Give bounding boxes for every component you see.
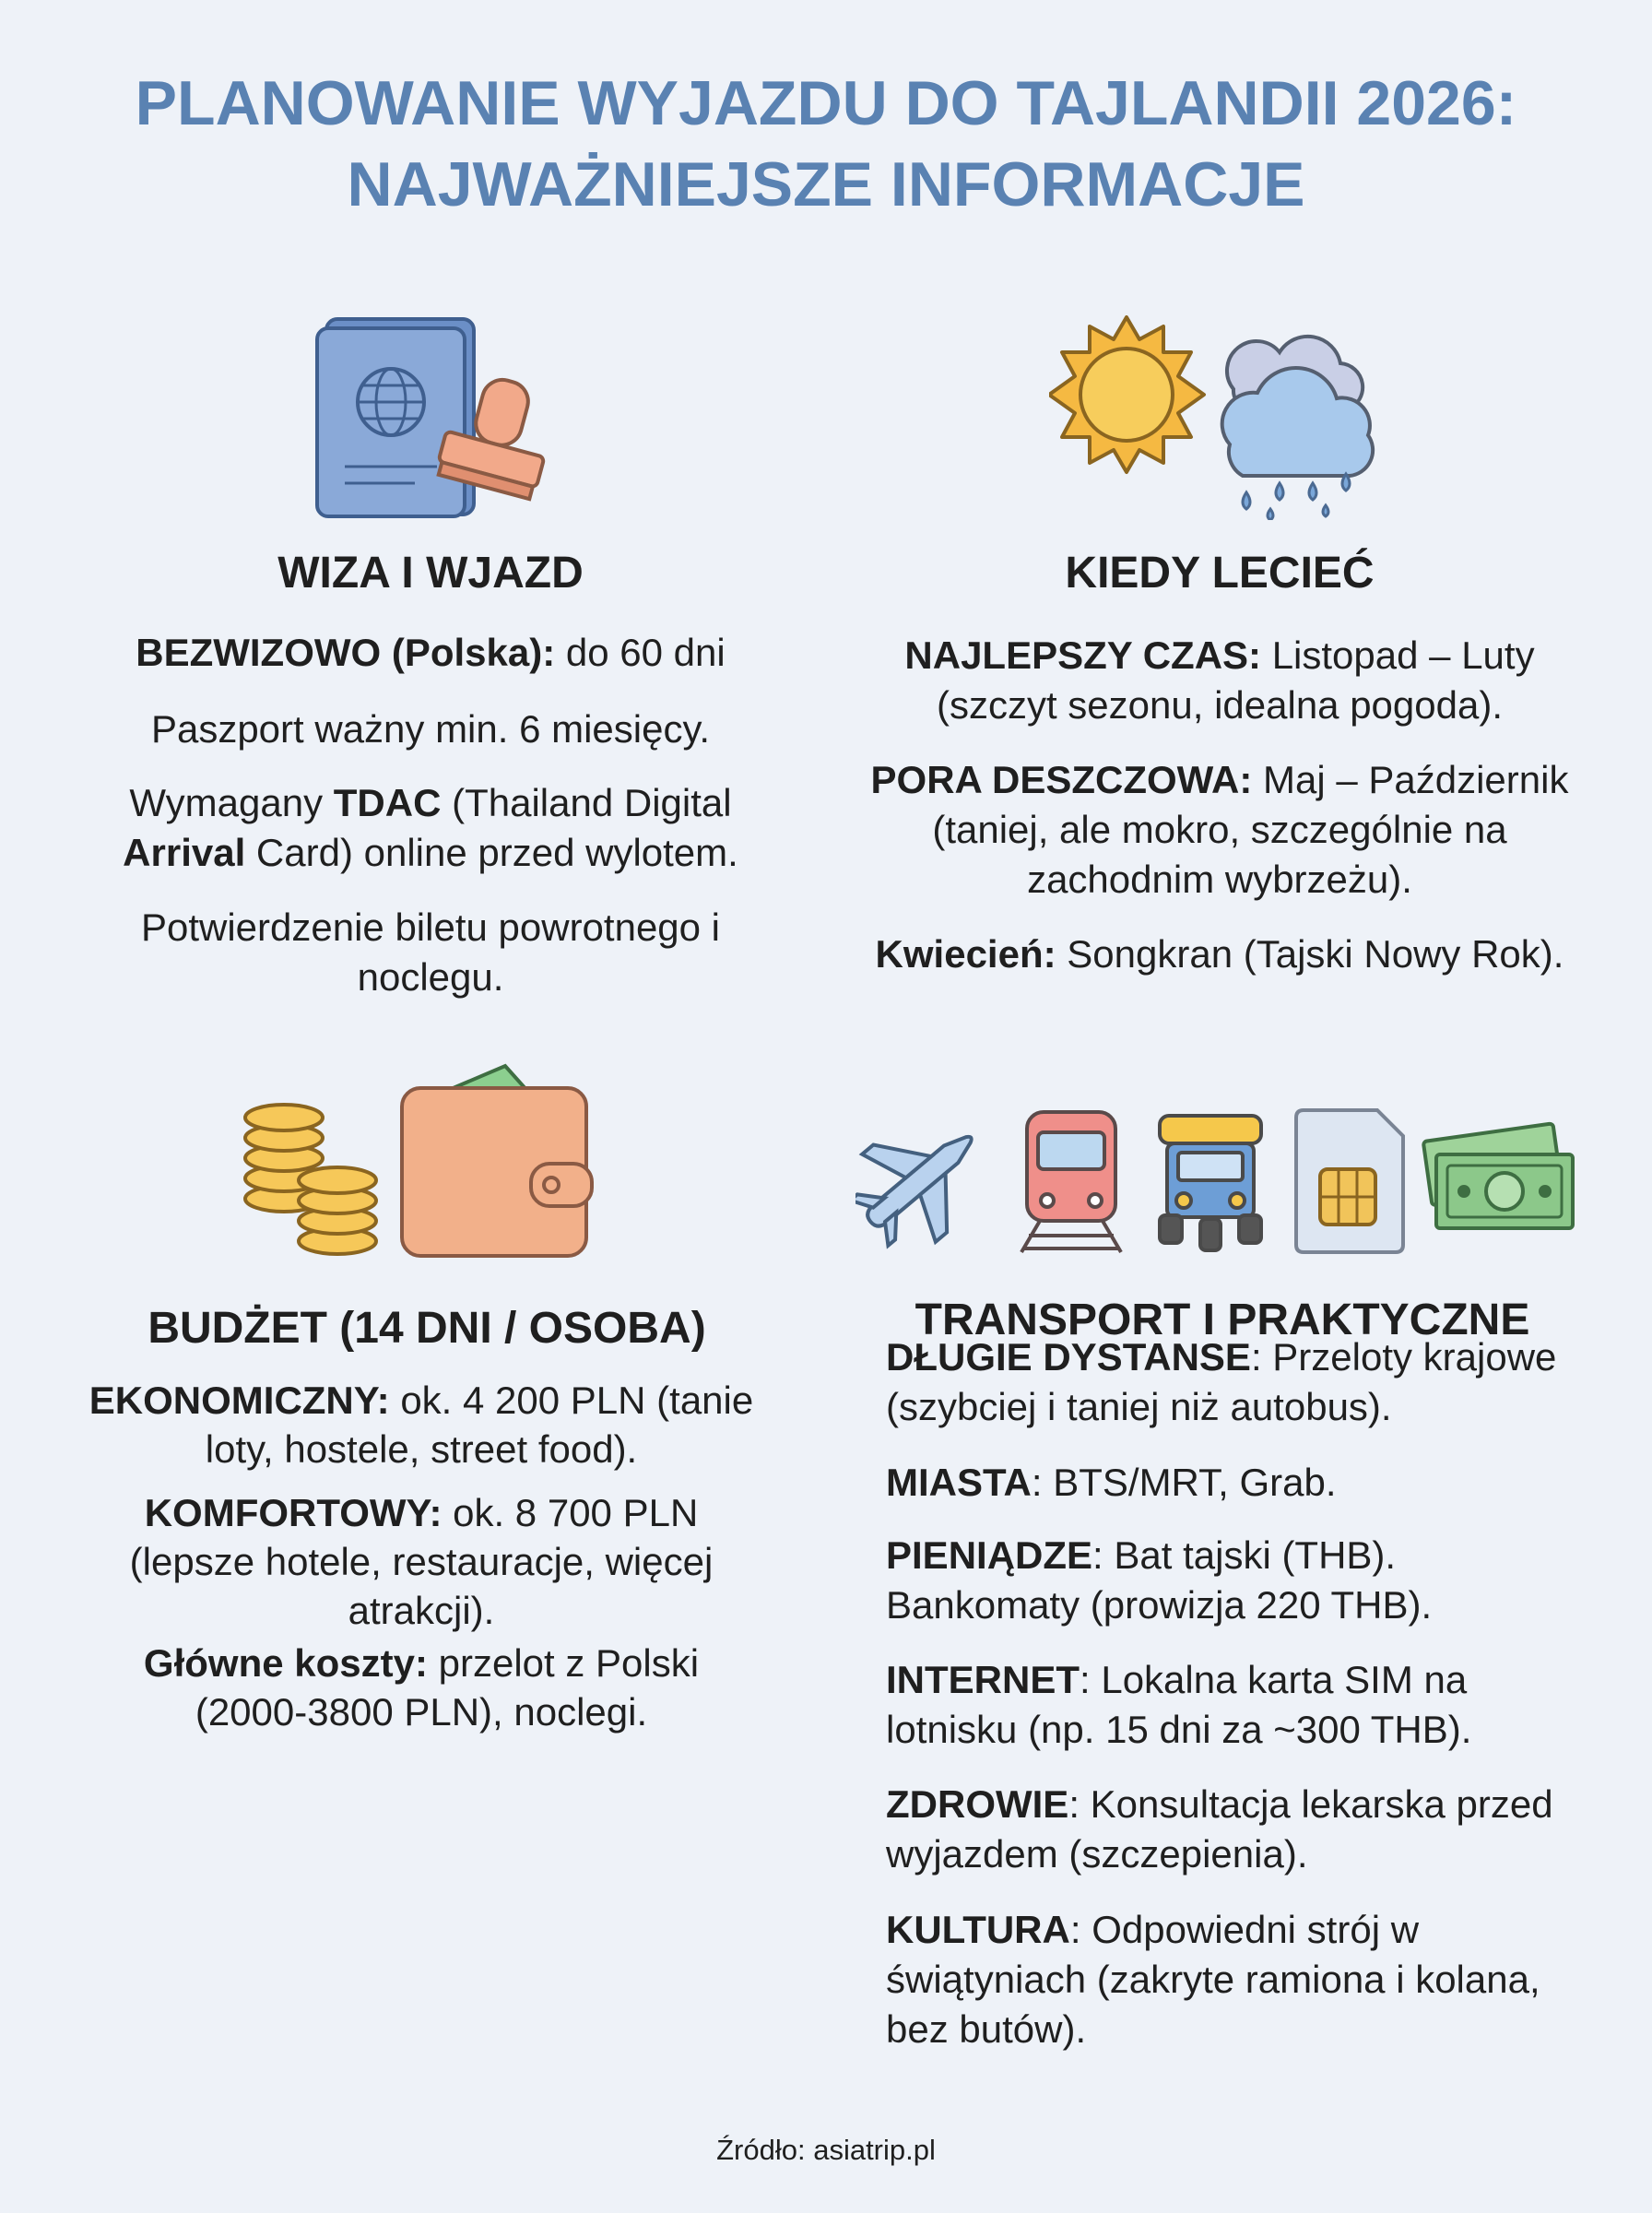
train: [1021, 1112, 1121, 1252]
sim card: [1296, 1110, 1403, 1252]
tuk tuk: [1160, 1116, 1261, 1250]
text: transport: INTERNET: Lokalna karta SIM na: [886, 1658, 1467, 1701]
text: when: Kwiecień: Songkran (Tajski Nowy Rok).: [876, 932, 1564, 976]
text: budget: loty, hostele, street food).: [206, 1427, 637, 1471]
text: visa: Paszport ważny min. 6 miesięcy.: [151, 707, 710, 751]
source: Źródło: asiatrip.pl: [716, 2134, 936, 2166]
text: transport: PIENIĄDZE: Bat tajski (THB).: [886, 1533, 1396, 1577]
text: visa: Potwierdzenie biletu powrotnego i: [141, 905, 720, 949]
text: budget: EKONOMICZNY: ok. 4 200 PLN (tanie: [89, 1379, 753, 1422]
text: budget: atrakcji).: [348, 1589, 494, 1632]
text: when: PORA DESZCZOWA: Maj – Październik: [871, 758, 1568, 801]
money: [1423, 1123, 1573, 1228]
text: budget: (2000-3800 PLN), noclegi.: [195, 1690, 647, 1734]
text: visa: BEZWIZOWO (Polska): do 60 dni: [136, 631, 726, 674]
text: transport: ZDROWIE: Konsultacja lekarska przed: [886, 1782, 1553, 1826]
heading: budget: BUDŻET (14 DNI / OSOBA): [148, 1304, 706, 1353]
text: when: [871, 633, 1569, 976]
heading: when: KIEDY LECIEĆ: [1065, 549, 1375, 598]
text: transport: bez butów).: [886, 2007, 1086, 2051]
text: transport: DŁUGIE DYSTANSE: Przeloty krajowe: [886, 1335, 1556, 1379]
icon: transport row: [856, 1108, 1575, 1254]
text: visa: Arrival Card) online przed wylotem.: [123, 831, 738, 874]
title: PLANOWANIE WYJAZDU DO TAJLANDII 2026:: [136, 68, 1516, 138]
heading: visa: WIZA I WJAZD: [277, 549, 584, 598]
text: transport: KULTURA: Odpowiedni strój w: [886, 1908, 1419, 1951]
text: budget: Główne koszty: przelot z Polski: [144, 1641, 699, 1685]
text: visa: Wymagany TDAC (Thailand Digital: [129, 781, 732, 824]
text: budget: (lepsze hotele, restauracje, więcej: [130, 1540, 713, 1583]
plane: [832, 1094, 1008, 1267]
title: [136, 68, 1516, 219]
text: transport: lotnisku (np. 15 dni za ~300 THB).: [886, 1708, 1471, 1751]
text: visa: noclegu.: [358, 955, 503, 999]
text: when: zachodnim wybrzeżu).: [1027, 858, 1412, 901]
text: transport: świątyniach (zakryte ramiona i kolana,: [886, 1958, 1540, 2001]
text: transport: wyjazdem (szczepienia).: [886, 1832, 1307, 1876]
text: budget: [89, 1379, 753, 1734]
text: when: (taniej, ale mokro, szczególnie na: [932, 808, 1507, 851]
icon: sun and rain cloud: [1049, 315, 1375, 520]
text: when: NAJLEPSZY CZAS: Listopad – Luty: [904, 633, 1535, 677]
icon: passport and stamp: [315, 317, 546, 518]
title: NAJWAŻNIEJSZE INFORMACJE: [347, 149, 1305, 219]
text: when: (szczyt sezonu, idealna pogoda).: [937, 683, 1503, 727]
text: budget: KOMFORTOWY: ok. 8 700 PLN: [145, 1491, 698, 1534]
text: transport: [886, 1335, 1556, 2051]
heading: transport: TRANSPORT I PRAKTYCZNE: [915, 1296, 1529, 1344]
text: visa: [123, 631, 738, 999]
text: transport: MIASTA: BTS/MRT, Grab.: [886, 1461, 1337, 1504]
text: transport: Bankomaty (prowizja 220 THB).: [886, 1583, 1432, 1627]
icon: coins and wallet: [243, 1064, 594, 1258]
text: transport: (szybciej i taniej niż autobus).: [886, 1385, 1392, 1428]
